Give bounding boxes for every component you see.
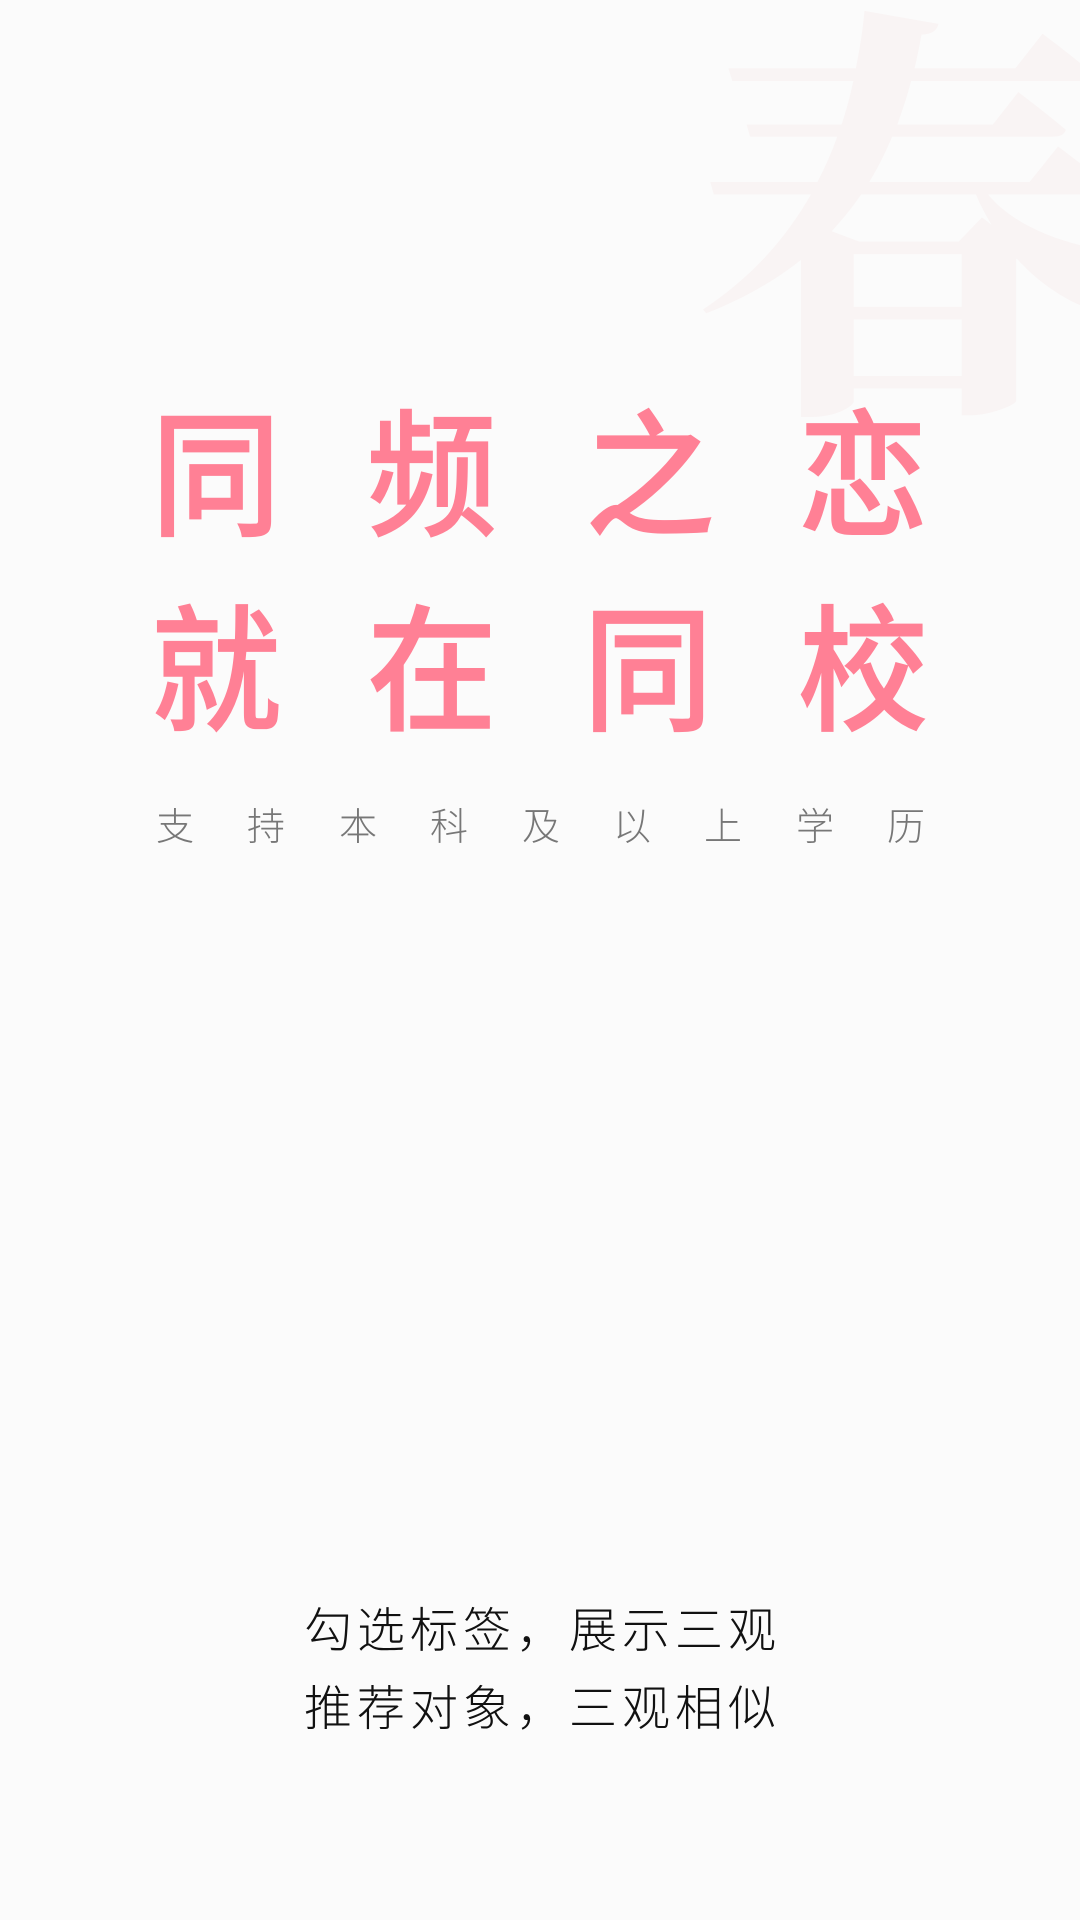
text: 恋 (798, 402, 928, 555)
title line 1 (151, 402, 928, 555)
text: 同 (151, 402, 281, 555)
text: 科 (430, 807, 468, 849)
text: 及 (522, 807, 560, 849)
text: 本 (339, 807, 377, 849)
text: 持 (247, 807, 285, 849)
text: 上 (704, 807, 742, 849)
bottom text line 2: 推荐对象，三观相似 (304, 1683, 781, 1736)
text: 在 (367, 597, 497, 750)
text: 就 (151, 597, 281, 750)
text: 同 (583, 597, 713, 750)
bottom text line 1: 勾选标签，展示三观 (304, 1605, 781, 1658)
text: 学 (796, 807, 834, 849)
text: 之 (585, 402, 715, 555)
text: 支 (156, 807, 194, 849)
text: 频 (367, 402, 497, 555)
text: 历 (887, 807, 925, 849)
subtitle: education requirement (156, 807, 925, 849)
text: 以 (613, 807, 651, 849)
title line 2 (151, 597, 928, 750)
text: 校 (798, 597, 928, 750)
